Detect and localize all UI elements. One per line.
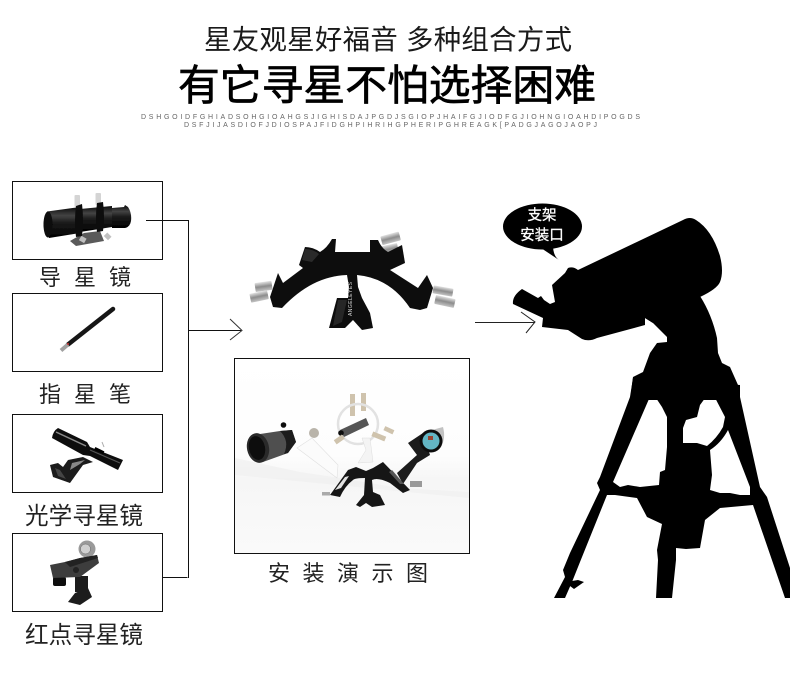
callout: mount port — [503, 204, 582, 260]
mount arm and head — [630, 296, 740, 400]
label: 导星镜: 导星镜 — [39, 265, 131, 290]
title: subtitle line: 星友观星好福音 多种组合方式 — [204, 24, 572, 55]
icon: optical finder — [50, 428, 123, 483]
finder clamp on leg — [566, 580, 584, 589]
panel: guide scope — [12, 182, 162, 260]
callout: mount port: 支架 — [528, 207, 556, 224]
decorative latin text block: DSFJIJASDIOFJDIOSPAJFIDGHPIHRIHGPHERIPGHREAGK[PADGJAGOJAOPJ — [184, 122, 597, 129]
panel: optical finder — [12, 414, 162, 492]
telescope silhouette — [513, 218, 790, 598]
decorative latin text block: DSHGOIDFGHIADSOHGIOAHGSJIGHISDAJPGDJSGIOPJHAIFGJIODFGJIOHNGIOAHDIPOGDS — [141, 114, 640, 121]
brand mark: ANGELEYES — [348, 281, 354, 316]
icon: guide scope — [44, 193, 131, 246]
tripod legs, column and spreader — [554, 378, 790, 598]
title: main heading: 有它寻星不怕选择困难 — [178, 62, 596, 109]
arrow: to mount port — [475, 312, 535, 333]
panel: red dot finder — [12, 534, 162, 612]
photo subject: assembled finders — [235, 393, 469, 507]
label: 光学寻星镜: 光学寻星镜 — [25, 503, 143, 530]
label: 安装演示图: 安装演示图 — [268, 561, 428, 586]
icon: laser pointer — [61, 309, 113, 350]
icon: red dot finder — [50, 540, 99, 605]
label: 指星笔: 指星笔 — [39, 382, 131, 407]
panel: installation photo — [234, 358, 470, 554]
arrow: to mount — [230, 319, 242, 340]
connector lines — [146, 220, 241, 578]
decorative latin text block — [141, 114, 640, 129]
optical tube — [513, 218, 722, 340]
icon: dovetail bracket mount — [249, 232, 456, 330]
panel: laser pointer — [12, 294, 162, 372]
label: 红点寻星镜: 红点寻星镜 — [25, 622, 143, 649]
callout: mount port: 安装口 — [520, 227, 564, 244]
